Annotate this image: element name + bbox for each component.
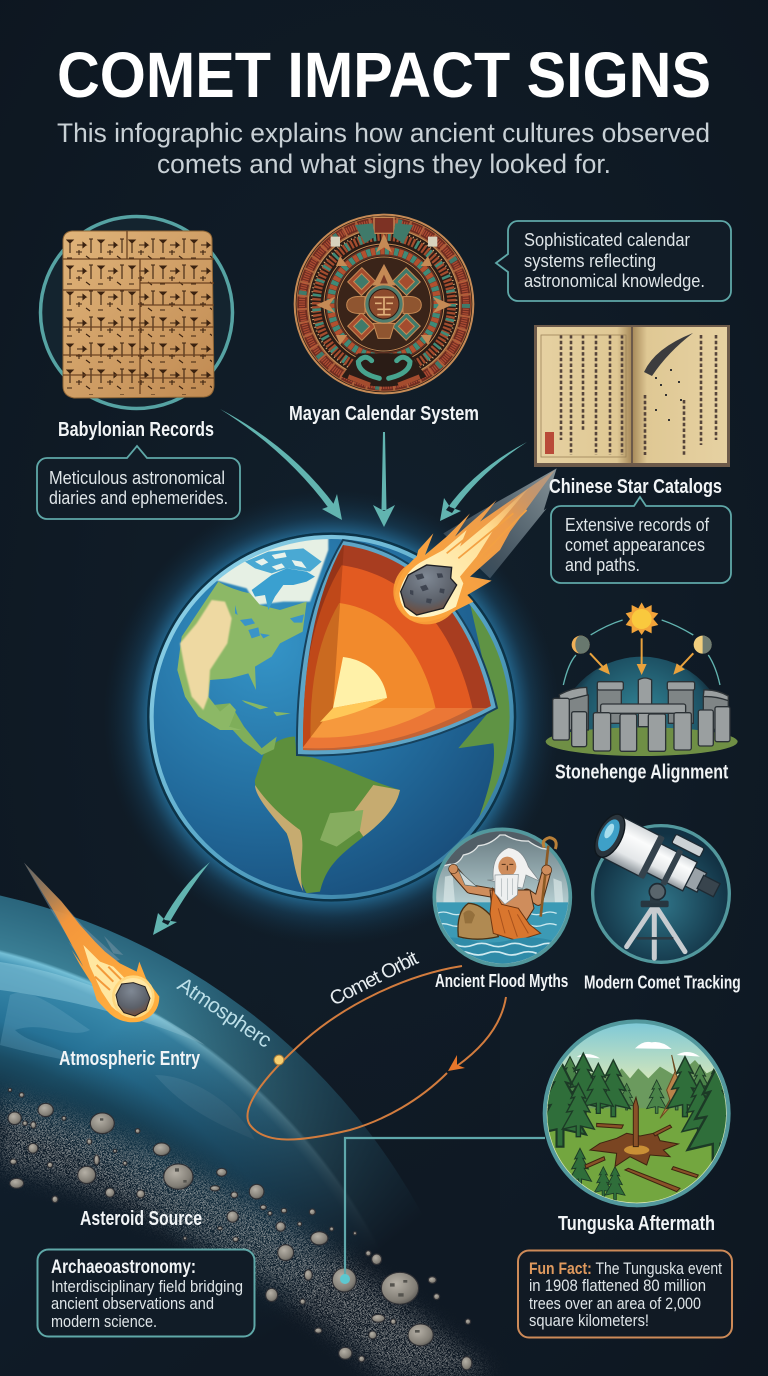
panel: modern comet tracking: [584, 802, 741, 993]
panel: mayan calendar: [289, 215, 731, 425]
comet halo: [393, 559, 460, 624]
panel: archaeoastronomy: modern science.: [51, 1312, 157, 1331]
green land: [177, 582, 307, 730]
sky arcs: [563, 620, 720, 685]
earth glow: [104, 489, 560, 945]
fun fact box: [518, 1250, 732, 1338]
icon: clay tablet: [63, 231, 214, 398]
ground: [546, 727, 738, 756]
subtitle: This infographic explains how ancient cultures observed: [57, 118, 710, 148]
label: Tunguska Aftermath: [558, 1213, 715, 1235]
central america: [213, 703, 277, 755]
icon: ring: [40, 216, 232, 408]
great lakes: [235, 605, 304, 638]
panel: stonehenge alignment: [546, 602, 738, 784]
label: Stonehenge Alignment: [555, 762, 729, 784]
left face: [303, 545, 344, 747]
callout: [496, 221, 731, 301]
callout: comet appearances: [565, 535, 705, 555]
beard: [495, 874, 518, 904]
alignment arrows: [590, 638, 693, 675]
icon: flood scene: [436, 831, 568, 964]
icon: circle frame: [434, 829, 570, 965]
panel: chinese star catalogs: [534, 325, 731, 583]
panel: babylonian records: [37, 216, 240, 519]
callout: diaries and ephemerides.: [49, 488, 228, 508]
panel: tunguska aftermath: [518, 1021, 746, 1338]
serpents: [342, 353, 426, 387]
title: COMET IMPACT SIGNS: [57, 39, 711, 111]
comet rock: [401, 565, 457, 615]
icon: forest blast scene: [542, 1019, 731, 1208]
arms: [455, 871, 547, 901]
callout: Extensive records of: [565, 515, 710, 535]
standing stones: [553, 678, 730, 751]
icon: sun: [626, 602, 658, 635]
atmosphere rim: [148, 534, 515, 900]
lower face: [303, 708, 487, 750]
icon: telescope tube: [589, 802, 731, 911]
label: Mayan Calendar System: [289, 403, 479, 425]
panel: archaeoastronomy: ancient observations and: [51, 1294, 214, 1313]
comet inner glow: [399, 487, 530, 617]
sky dome: [555, 657, 728, 743]
label: Ancient Flood Myths: [435, 970, 568, 991]
south america: [255, 737, 400, 893]
panel: archaeoastronomy: [38, 1250, 254, 1336]
fun fact box: trees over an area of 2,000: [529, 1294, 701, 1313]
callout: Meticulous astronomical: [49, 468, 225, 488]
inner core: [333, 657, 387, 708]
ice cap: [215, 536, 328, 605]
arrow: chinese: [440, 442, 527, 521]
icon: calendar stone: [295, 215, 473, 393]
left hand: [449, 864, 458, 874]
icon: open book: [534, 325, 730, 467]
telescope mount: [649, 884, 665, 900]
waterfalls: [443, 875, 563, 903]
callout: astronomical knowledge.: [524, 271, 705, 291]
arctic sea and islands: [245, 548, 322, 573]
comet grey tail: [443, 468, 557, 578]
asteroid field: [8, 1088, 472, 1370]
fun fact box: square kilometers!: [529, 1311, 649, 1330]
fun fact box: Fun Fact: The Tunguska event: [529, 1259, 722, 1278]
fallen logs: [585, 1123, 698, 1192]
globe sphere and south hemisphere: [148, 534, 517, 900]
hair: [487, 848, 539, 888]
label: Babylonian Records: [58, 419, 214, 441]
arrow: mayan: [373, 432, 395, 527]
arrows to earth: [153, 409, 527, 935]
comet orbit: [247, 966, 506, 1140]
callout: [551, 497, 731, 583]
label: Chinese Star Catalogs: [549, 476, 722, 498]
robe: [490, 888, 541, 941]
callout: and paths.: [565, 555, 640, 575]
panel: archaeoastronomy: Archaeoastronomy:: [51, 1257, 196, 1278]
icon: circle frame: [593, 826, 729, 962]
callout: [37, 446, 240, 519]
cut-away interior: [296, 538, 498, 756]
staff: [541, 838, 556, 917]
callout: Sophisticated calendar: [524, 230, 690, 250]
burning tree: [660, 1055, 678, 1118]
arrow: babylonian: [220, 409, 342, 520]
orbit label: Comet Orbit: [326, 947, 422, 1010]
connector line from asteroid to Tunguska: [340, 1138, 545, 1284]
fun fact box: in 1908 flattened 80 million: [529, 1276, 706, 1295]
north america detail: [177, 536, 328, 730]
label: atmospheric entry: Atmospheric Entry: [59, 1048, 201, 1070]
comet grey flecks: [24, 863, 123, 965]
panel: ancient flood myths: [432, 828, 572, 991]
impacting comet: [393, 468, 557, 624]
comet flame: [24, 863, 159, 1022]
blast crater: [590, 1133, 678, 1167]
atmosphere label: Atmospherc: [173, 973, 276, 1053]
atmospheric entry comet: [24, 863, 159, 1022]
torso: [490, 890, 534, 923]
distant planet with atmosphere: [0, 880, 500, 1376]
face: [498, 857, 516, 877]
storm clouds: [444, 831, 547, 866]
rock figure: [458, 903, 498, 939]
label: asteroid source: Asteroid Source: [80, 1208, 202, 1230]
africa limb: [458, 606, 510, 816]
sea: [436, 902, 568, 964]
arid west: [180, 600, 232, 710]
caribbean islands: [242, 700, 291, 716]
comet rock: [116, 983, 150, 1016]
storm in hand: [458, 870, 477, 887]
panel: archaeoastronomy: Interdisciplinary field bridging: [51, 1277, 243, 1296]
top ornaments: [374, 217, 394, 233]
comet flame: [395, 470, 555, 622]
callout: systems reflecting: [524, 251, 656, 271]
central earth globe: [104, 489, 560, 945]
icon: tripod: [627, 890, 685, 958]
icon: moons: [572, 636, 712, 654]
arrowheads: [316, 233, 452, 345]
standing trunk: [633, 1097, 638, 1147]
foreground waves: [450, 938, 552, 964]
orbit marker: [274, 1055, 284, 1065]
subtitle: comets and what signs they looked for.: [157, 149, 611, 179]
comet inner glow: [83, 945, 149, 1015]
subtitle: [57, 118, 710, 179]
hudson bay: [252, 568, 315, 610]
asteroid dust belt: [0, 1098, 490, 1376]
arrow: down to atmosphere: [153, 862, 210, 935]
orbit return arrow: [448, 997, 506, 1071]
sun stone sectors: [347, 265, 421, 340]
